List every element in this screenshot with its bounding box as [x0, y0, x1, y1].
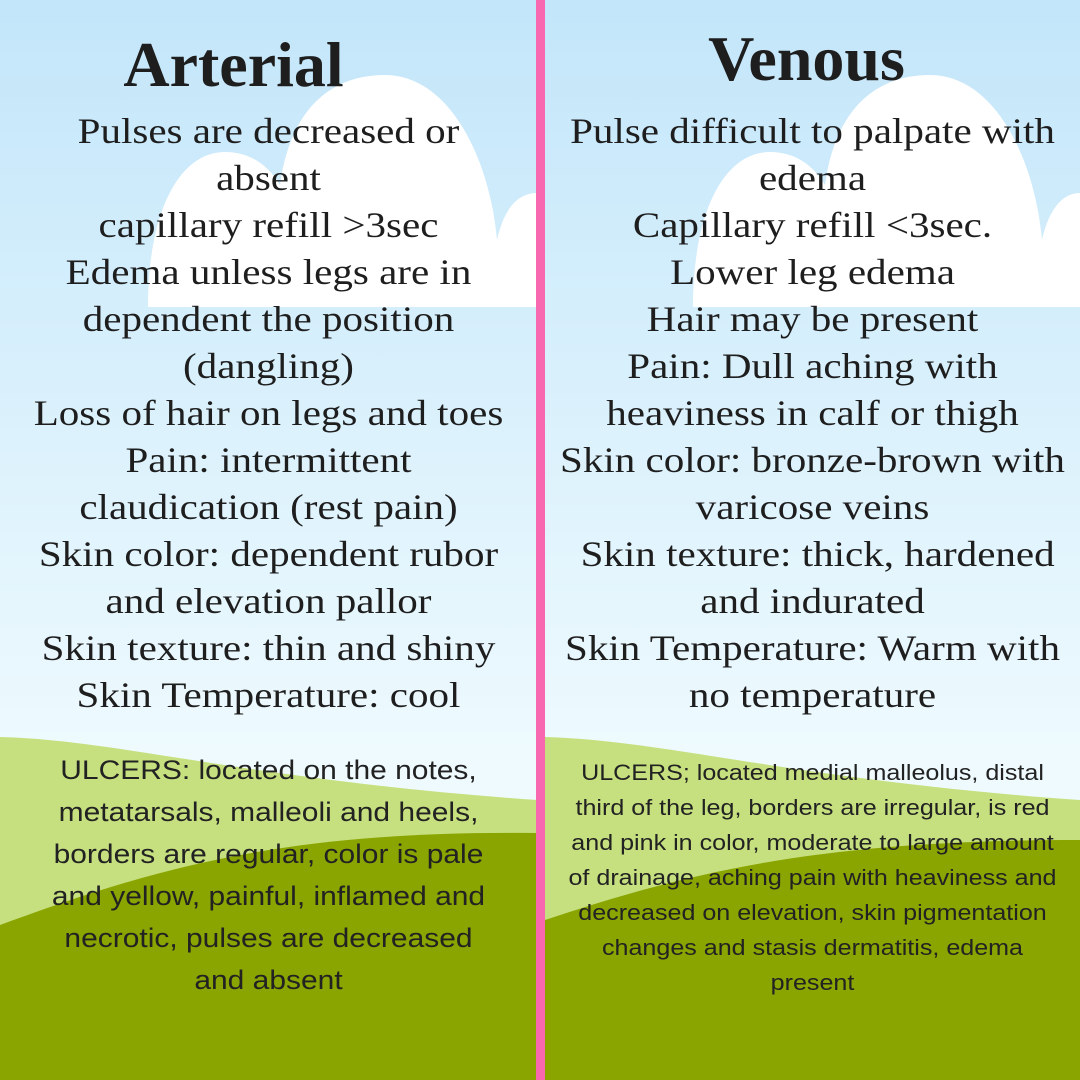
- title: Arterial: Arterial: [123, 29, 344, 100]
- text block: arterial signs: [34, 111, 503, 715]
- text block: arterial signs: (dangling): [183, 346, 354, 386]
- divider: [536, 0, 545, 1080]
- text block: venous signs: Skin texture: thick, hardened: [581, 534, 1055, 574]
- text block: venous ulcers: ULCERS; located medial malleolus, distal: [581, 760, 1044, 785]
- text block: venous signs: Skin Temperature: Warm with: [565, 628, 1060, 668]
- text block: venous signs: [560, 111, 1065, 715]
- text block: venous ulcers: and pink in color, moderate to large amount: [571, 830, 1054, 855]
- text block: venous ulcers: changes and stasis dermatitis, edema: [602, 935, 1023, 960]
- text block: arterial signs: capillary refill >3sec: [99, 205, 438, 245]
- text block: arterial ulcers: metatarsals, malleoli and heels,: [59, 797, 478, 827]
- text block: venous ulcers: present: [771, 970, 854, 995]
- text block: arterial signs: Pulses are decreased or: [78, 111, 459, 151]
- text block: venous signs: no temperature: [689, 675, 936, 715]
- text block: arterial ulcers: necrotic, pulses are decreased: [64, 923, 473, 953]
- text block: venous signs: Pulse difficult to palpate with: [570, 111, 1055, 151]
- text block: venous ulcers: third of the leg, borders are irregular, is red: [576, 795, 1049, 820]
- text block: venous signs: Lower leg edema: [670, 252, 955, 292]
- text block: arterial signs: Skin Temperature: cool: [77, 675, 460, 715]
- text block: arterial ulcers: and yellow, painful, inflamed and: [52, 881, 485, 911]
- panel: arterial: [0, 0, 536, 1080]
- text block: venous ulcers: of drainage, aching pain with heaviness and: [568, 865, 1056, 890]
- text block: arterial signs: and elevation pallor: [106, 581, 431, 621]
- title: Venous: Venous: [708, 23, 905, 94]
- text block: arterial signs: claudication (rest pain): [79, 487, 458, 527]
- text block: venous signs: Skin color: bronze-brown with: [560, 440, 1065, 480]
- text block: arterial signs: Edema unless legs are in: [66, 252, 471, 292]
- text block: arterial signs: absent: [216, 158, 321, 198]
- text block: arterial ulcers: borders are regular, color is pale: [54, 839, 483, 869]
- text block: arterial signs: Skin texture: thin and shiny: [42, 628, 495, 668]
- text block: arterial signs: Loss of hair on legs and toes: [34, 393, 503, 433]
- text block: arterial ulcers: and absent: [194, 965, 343, 995]
- text block: venous ulcers: [568, 760, 1056, 995]
- text block: arterial signs: Pain: intermittent: [125, 440, 412, 480]
- text block: venous signs: and indurated: [700, 581, 925, 621]
- text block: venous signs: edema: [759, 158, 866, 198]
- text block: venous ulcers: decreased on elevation, skin pigmentation: [578, 900, 1047, 925]
- text block: arterial ulcers: ULCERS: located on the notes,: [60, 755, 477, 785]
- text block: arterial signs: Skin color: dependent rubor: [39, 534, 498, 574]
- text block: arterial ulcers: [52, 755, 485, 995]
- text block: venous signs: Capillary refill <3sec.: [633, 205, 992, 245]
- panel: venous: [545, 0, 1080, 1080]
- text block: arterial signs: dependent the position: [83, 299, 454, 339]
- text block: venous signs: varicose veins: [696, 487, 929, 527]
- text block: venous signs: heaviness in calf or thigh: [606, 393, 1019, 433]
- text block: venous signs: Pain: Dull aching with: [627, 346, 998, 386]
- text block: venous signs: Hair may be present: [647, 299, 978, 339]
